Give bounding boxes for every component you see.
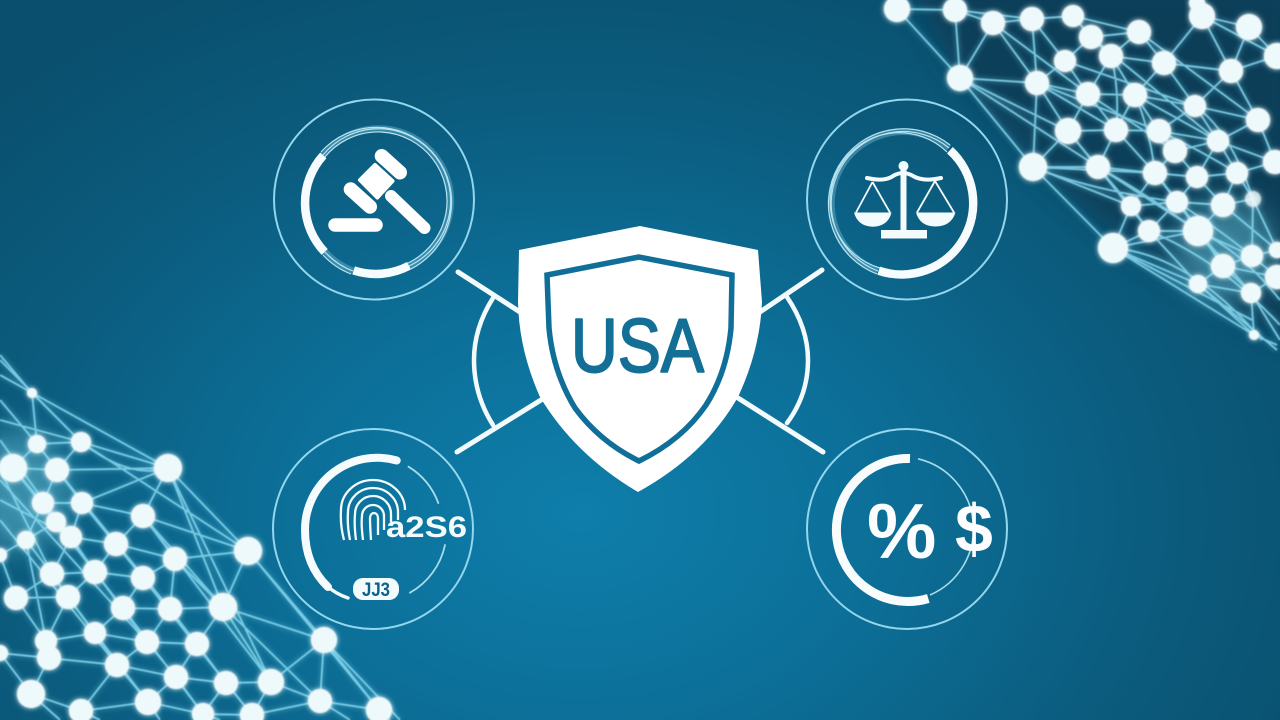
network links: bottom left	[0, 355, 400, 720]
shield inner outline	[547, 257, 732, 461]
shield emblem	[518, 226, 762, 492]
garbled badge	[353, 578, 399, 601]
connector lines and arcs	[457, 270, 823, 452]
panel: fingerprint	[273, 429, 473, 629]
icon: gavel	[335, 156, 424, 228]
network: top right	[884, 0, 1280, 350]
network nodes: top right	[884, 0, 1280, 340]
garbled label: a2S6	[386, 511, 467, 544]
progress ring	[828, 129, 973, 274]
progress ring	[305, 127, 452, 274]
icon: dollar: $	[955, 491, 993, 567]
icon: fingerprint	[341, 480, 405, 540]
shield outer	[518, 226, 762, 492]
icon: percent: %	[867, 487, 936, 575]
panel: gavel	[274, 100, 474, 300]
outer ring	[807, 429, 1007, 629]
shield label: USA	[571, 304, 704, 389]
icon: balance scales	[854, 162, 956, 238]
network links: top right	[897, 3, 1280, 350]
network nodes: bottom left	[0, 388, 392, 720]
network: bottom left	[0, 355, 400, 720]
panel: scales of justice	[807, 100, 1007, 300]
outer ring	[807, 100, 1007, 300]
outer ring	[273, 429, 473, 629]
panel: percent and dollar	[807, 429, 1007, 629]
outer ring	[274, 100, 474, 300]
garbled badge: JJ3	[362, 580, 390, 601]
progress ring	[305, 458, 445, 598]
progress ring	[836, 458, 973, 601]
